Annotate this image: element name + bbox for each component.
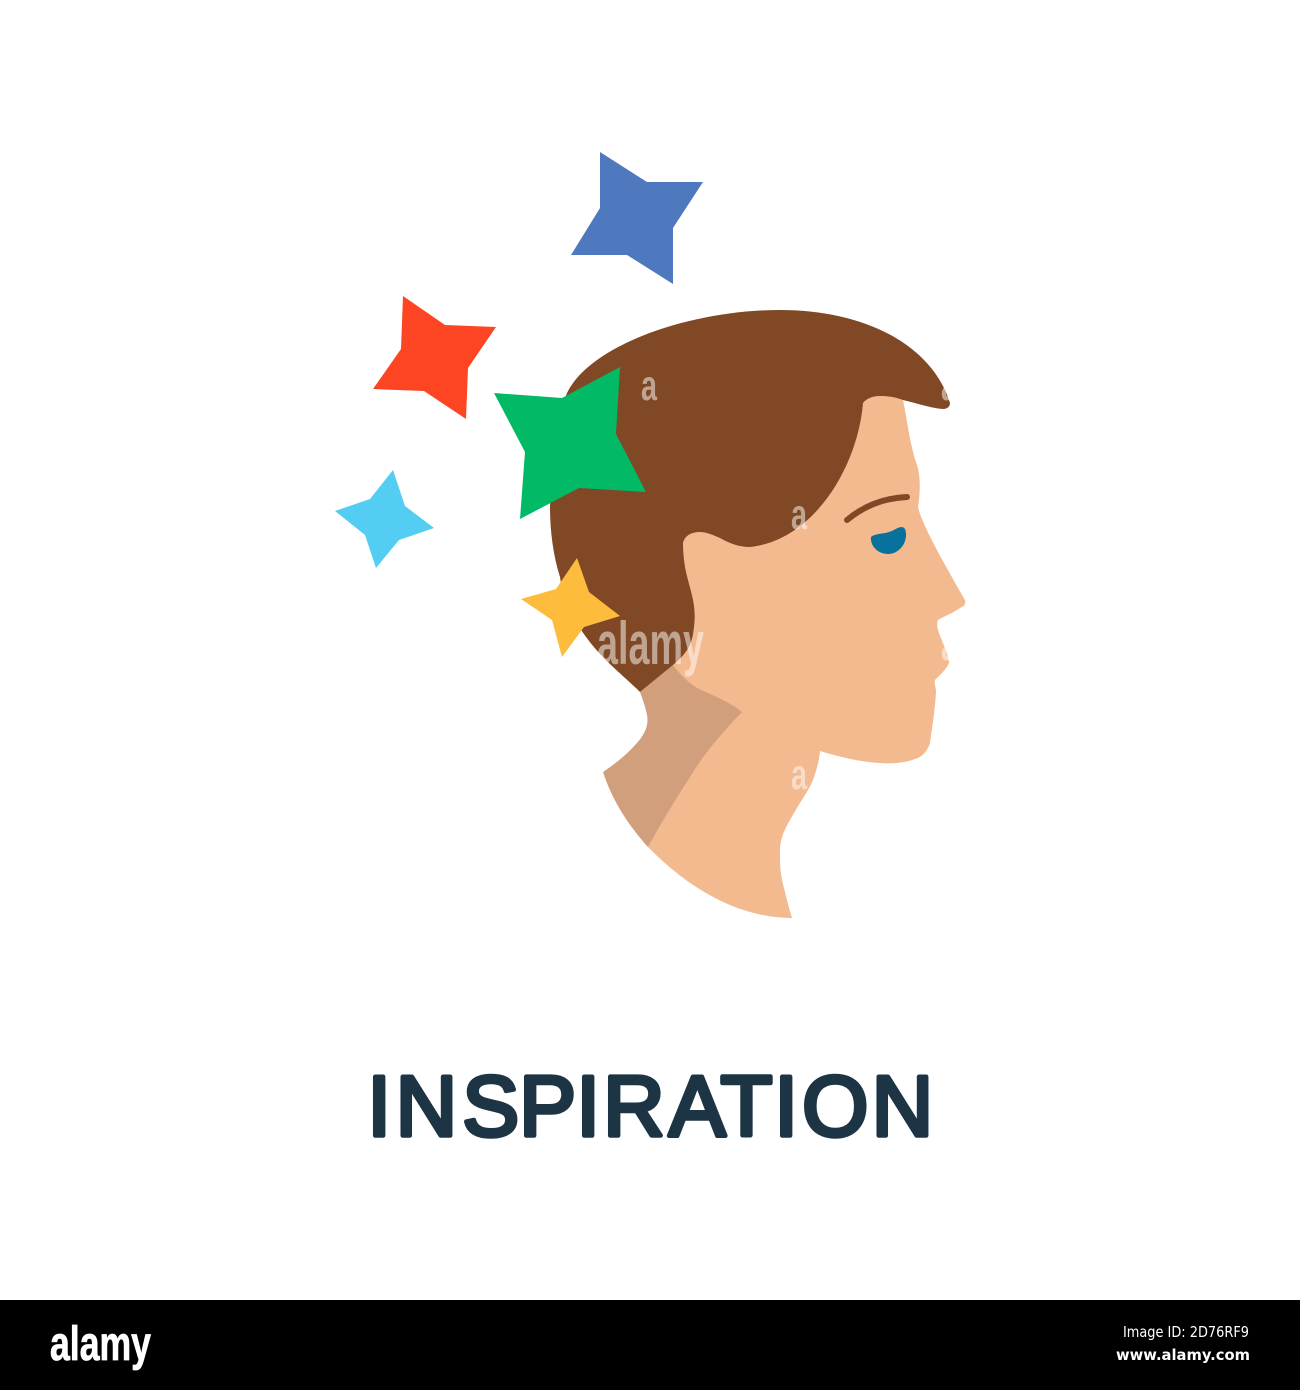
footer bar — [0, 1300, 1300, 1390]
neck shadow — [603, 665, 742, 847]
star: light blue — [335, 470, 434, 568]
star: green — [494, 367, 646, 519]
watermark marks: a — [941, 362, 958, 410]
eyebrow — [847, 497, 907, 520]
logo: alamy — [50, 1318, 151, 1371]
title: INSPIRATION — [367, 1060, 933, 1154]
eye — [871, 527, 906, 554]
watermark marks: a — [791, 751, 808, 799]
watermark marks — [597, 362, 958, 799]
hair — [550, 310, 950, 692]
star: blue — [571, 152, 703, 284]
image id: Image ID: 2D76RF9 — [1123, 1323, 1249, 1341]
watermark marks: a — [641, 362, 658, 410]
watermark marks: a — [941, 622, 958, 670]
star: red — [373, 296, 496, 419]
face and neck — [648, 388, 965, 918]
url: www.alamy.com — [1116, 1346, 1250, 1364]
watermark marks: a — [791, 491, 808, 539]
star: yellow — [521, 558, 620, 657]
illustration: head with stars — [335, 152, 965, 918]
watermark marks: alamy — [597, 610, 704, 677]
